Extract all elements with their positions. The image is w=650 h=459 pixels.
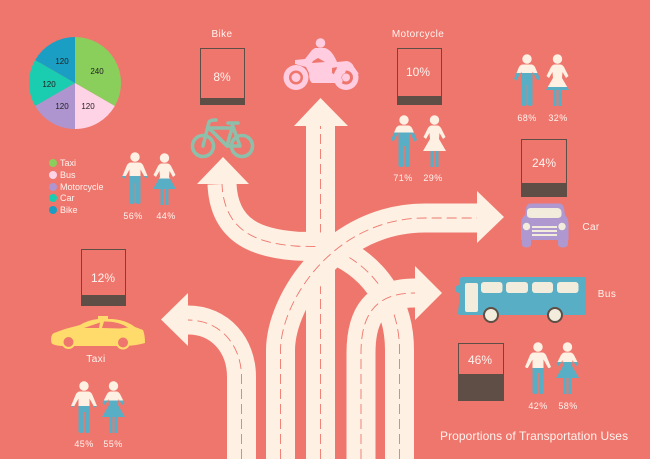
- taxi road arrow: [161, 293, 242, 459]
- pie chart: 240: [90, 67, 104, 76]
- legend: Taxi: [60, 158, 76, 168]
- pie chart: 120: [81, 102, 95, 111]
- icon: taxi: [51, 316, 145, 348]
- bus rider split: [525, 342, 579, 411]
- bike label: Bike: [211, 29, 233, 40]
- legend: Car: [60, 193, 75, 203]
- taxi label: Taxi: [86, 354, 106, 365]
- motorcycle share box: 10%: [406, 65, 430, 79]
- bike road arrow: [197, 157, 400, 459]
- bike rider split: 44%: [156, 211, 176, 221]
- legend: Bus: [60, 170, 76, 180]
- bus rider split: 42%: [528, 401, 548, 411]
- bus group: [456, 277, 616, 411]
- taxi rider split: 55%: [103, 439, 123, 449]
- bike rider split: 56%: [123, 211, 143, 221]
- pie chart: [29, 37, 121, 129]
- motorcycle label: Motorcycle: [392, 29, 444, 40]
- roads and arrows: [161, 98, 504, 459]
- legend: Bike: [60, 205, 78, 215]
- icon: car: [521, 204, 568, 248]
- pie chart: 120: [42, 80, 56, 89]
- motorcycle road arrow: [294, 98, 348, 459]
- icon: motorcycle: [284, 38, 359, 90]
- bus road arrow: [361, 266, 442, 459]
- car road arrow: [280, 191, 504, 459]
- motorcycle group: [284, 29, 446, 183]
- bus rider split: 58%: [558, 401, 578, 411]
- title: Proportions of Transportation Uses: [440, 429, 628, 443]
- legend: [49, 158, 104, 215]
- taxi rider split: [71, 381, 125, 449]
- icon: bus: [456, 277, 586, 322]
- bus share box: [458, 344, 504, 401]
- car rider split: [514, 54, 569, 123]
- pie chart: 120: [55, 102, 69, 111]
- car rider split: 32%: [548, 113, 568, 123]
- bike rider split: [122, 152, 176, 221]
- motorcycle rider split: [391, 115, 446, 183]
- car share box: 24%: [532, 156, 556, 170]
- bike share box: 8%: [213, 70, 231, 84]
- icon: bicycle: [192, 120, 252, 156]
- motorcycle rider split: 29%: [423, 173, 443, 183]
- bike share box: [200, 48, 245, 105]
- taxi rider split: 45%: [74, 439, 94, 449]
- bus label: Bus: [598, 289, 616, 300]
- car group: [514, 54, 600, 247]
- pie chart: 120: [55, 57, 69, 66]
- motorcycle rider split: 71%: [393, 173, 413, 183]
- bus share box: 46%: [468, 353, 492, 367]
- taxi share box: 12%: [91, 271, 115, 285]
- taxi group: [51, 250, 145, 449]
- bike group: [122, 29, 252, 221]
- car rider split: 68%: [517, 113, 537, 123]
- car share box: [521, 140, 567, 197]
- legend: Motorcycle: [60, 182, 104, 192]
- car label: Car: [582, 222, 600, 233]
- taxi share box: [81, 250, 126, 306]
- motorcycle share box: [397, 48, 442, 105]
